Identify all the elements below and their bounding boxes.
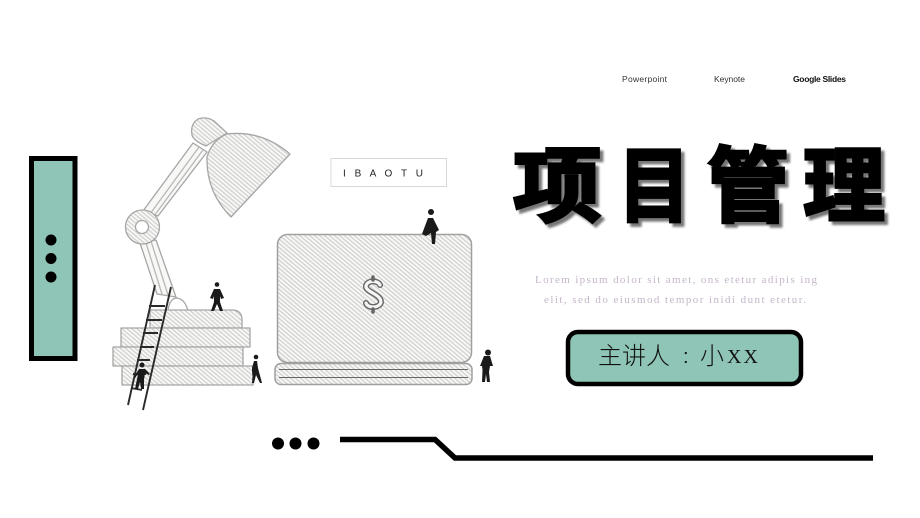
stack of books (113, 310, 253, 385)
title (513, 142, 889, 237)
presenter badge (568, 332, 801, 384)
illustration: laptop (275, 209, 493, 384)
top format links: Keynote (714, 74, 745, 84)
panel dots (46, 234, 56, 282)
bottom dots (272, 438, 320, 450)
dollar icon (366, 277, 381, 312)
bottom stepped line (340, 440, 873, 458)
title: 管 (707, 142, 789, 233)
title: 理 (803, 142, 885, 233)
laptop screen (278, 234, 472, 362)
brand label text: I B A O T U (343, 168, 423, 180)
top format links (622, 74, 846, 84)
top format links: Powerpoint (622, 74, 668, 84)
title: 目 (618, 142, 690, 233)
title: 项 (513, 142, 602, 233)
laptop base (275, 364, 472, 384)
lamp joint (126, 210, 160, 244)
brand label box (331, 158, 446, 186)
presenter name: XX (727, 346, 759, 368)
subtitle lorem text: elit, sed do eiusmod tempor inidi dunt etetur. (544, 294, 806, 306)
lamp arms (140, 143, 207, 311)
bold format link: Google Slides (793, 74, 846, 84)
figure: beside books (252, 355, 262, 383)
figure: beside laptop (480, 350, 493, 382)
presenter name (598, 343, 759, 370)
title: 管 (710, 146, 793, 236)
title: 目 (622, 145, 694, 237)
presenter name: 小 (700, 343, 724, 370)
lamp shade (207, 133, 290, 217)
subtitle lorem text (535, 274, 818, 306)
title: 项 (516, 145, 605, 237)
title: 理 (806, 146, 889, 236)
subtitle lorem text: Lorem ipsum dolor sit amet, ons etetur adipis ing (535, 274, 818, 286)
presenter name: : (683, 346, 689, 368)
figure: climbing ladder (134, 362, 150, 389)
illustration: desk lamp on books (113, 118, 290, 410)
presenter name: 主讲人 (598, 343, 670, 370)
ladder (128, 285, 171, 410)
lamp head (192, 118, 227, 146)
figure: sitting on laptop (422, 209, 439, 244)
left side panel (32, 158, 75, 358)
figure: standing on books (210, 282, 224, 311)
